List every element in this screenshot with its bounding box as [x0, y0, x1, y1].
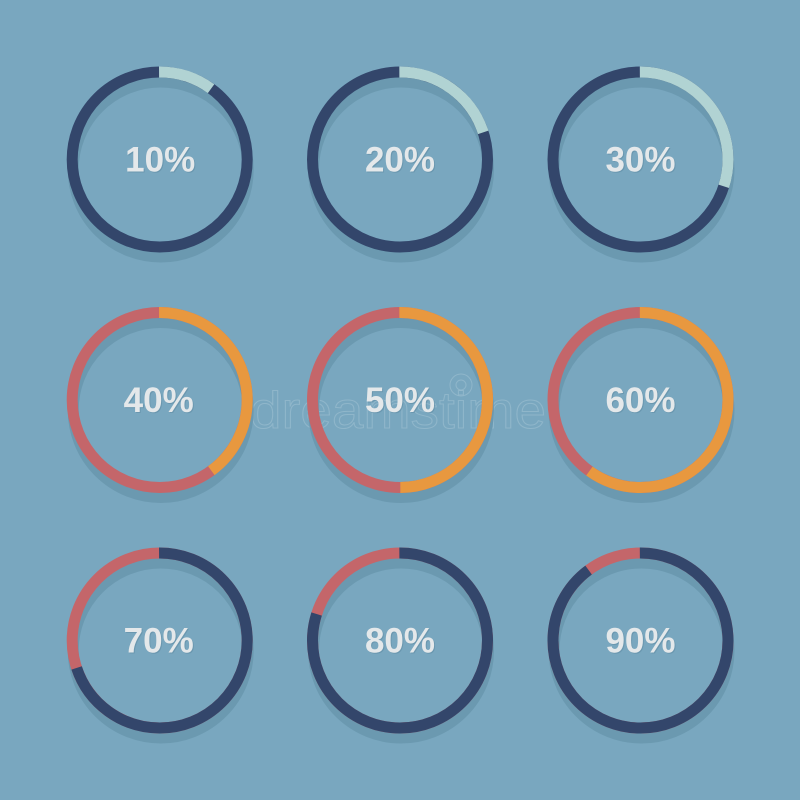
gauge: 70% — [72, 553, 248, 738]
watermark: dreamstime — [250, 382, 546, 440]
gauge: 70%: 70% — [124, 622, 194, 660]
gauge: 30% — [553, 72, 729, 257]
gauge: 60%: 60% — [606, 382, 677, 421]
gauge: 10%: 10% — [125, 140, 195, 180]
gauge: 80% — [312, 553, 488, 738]
gauge: 80%: 80% — [365, 622, 435, 660]
gauge: 50%: 50% — [366, 382, 436, 421]
gauge: 20%: 20% — [366, 142, 436, 180]
gauge: 90%: 90% — [606, 622, 677, 662]
gauge: 50%: 50% — [365, 381, 435, 420]
gauge: 10% — [72, 72, 248, 257]
gauge: 30%: 30% — [606, 142, 677, 180]
gauge: 10%: 10% — [126, 142, 196, 180]
gauge: 50% — [312, 312, 488, 498]
gauge: 60%: 60% — [605, 381, 676, 420]
gauge: 40%: 40% — [125, 382, 195, 421]
gauge: 30%: 30% — [605, 140, 676, 180]
gauge: 80%: 80% — [366, 622, 436, 662]
gauge: 60% — [553, 312, 729, 498]
gauge: 20% — [312, 72, 488, 257]
gauge: 40%: 40% — [124, 381, 194, 420]
gauge: 90% — [553, 553, 729, 738]
gauge: 70%: 70% — [125, 622, 195, 662]
gauge: 20%: 20% — [365, 140, 435, 180]
gauge: 90%: 90% — [605, 622, 676, 660]
gauge: 40% — [72, 312, 248, 498]
